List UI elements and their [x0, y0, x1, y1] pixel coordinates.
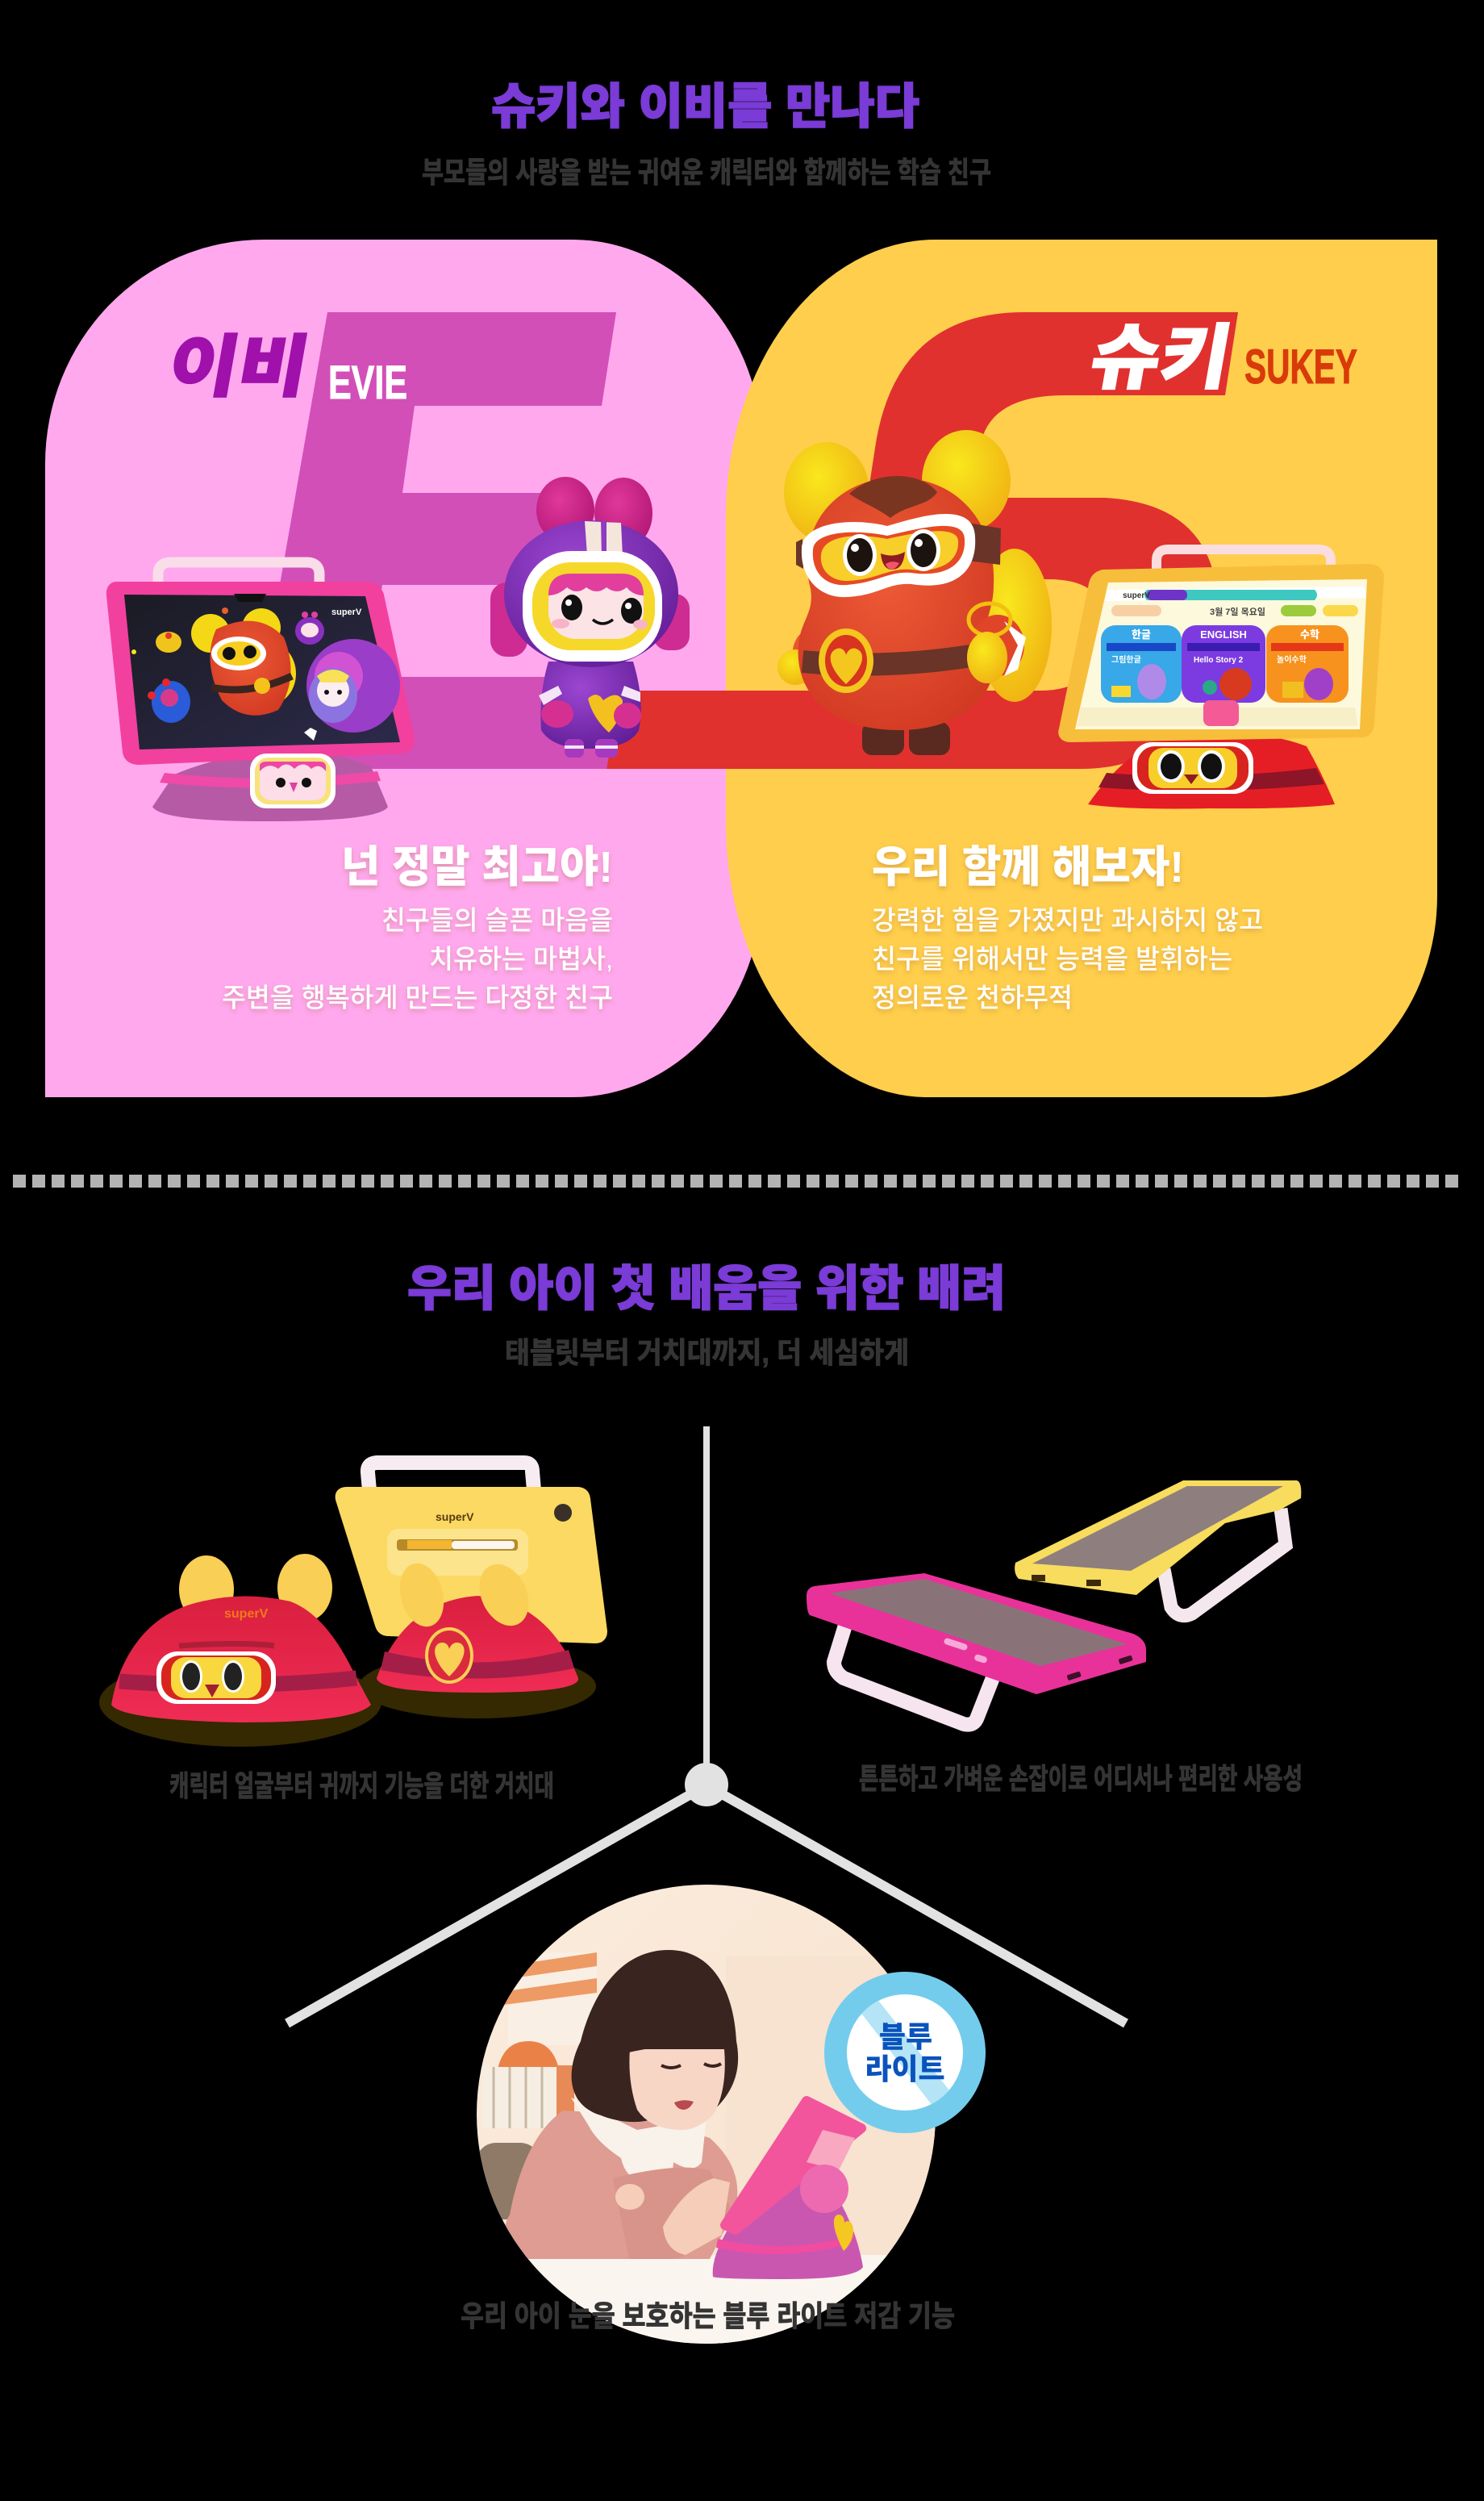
- yellow tablet handle: [1164, 1509, 1286, 1616]
- Evie badge on stand: [250, 754, 336, 808]
- badge: no blue light: [824, 1972, 986, 2133]
- buns: [536, 477, 652, 549]
- tablet screen UI: Hello Story 2: [1194, 656, 1244, 665]
- tablet handle: [158, 562, 319, 601]
- text block: Evie description: 치유하는 마법사,: [429, 944, 613, 974]
- text block: Evie description: 넌 정말 최고야!: [341, 843, 613, 891]
- front dome with Sukey face: superV: [224, 1607, 269, 1621]
- badge: no blue light: 블루: [879, 2020, 932, 2053]
- badge: no blue light: 라이트: [865, 2052, 945, 2086]
- big letter S: [607, 312, 1238, 769]
- tablet screen UI: superV: [1123, 591, 1150, 600]
- panel: Evie pink background: [45, 240, 762, 1097]
- stand base: [152, 749, 388, 821]
- text block: Evie description: [222, 843, 613, 1013]
- room background: [476, 1884, 937, 2345]
- heading: Evie name: 이비: [163, 329, 315, 405]
- text block: Sukey description: [872, 843, 1263, 1013]
- Sukey badge on stand: [1132, 742, 1253, 794]
- yellow tablet: [1015, 1480, 1301, 1595]
- text block: Evie description: 주변을 행복하게 만드는 다정한 친구: [222, 983, 613, 1013]
- body: [798, 478, 994, 730]
- title: care for first learning: 우리 아이 첫 배움을 위한 배려: [407, 1262, 1006, 1316]
- pink tablet: [807, 1573, 1146, 1694]
- connector lines with central node: [287, 1426, 1126, 2023]
- text block: Sukey description: 정의로운 천하무적: [872, 983, 1073, 1013]
- tablet screen UI: 3월 7일 목요일: [1210, 606, 1265, 617]
- goggles and face: [796, 514, 1001, 597]
- text block: Sukey description: 우리 함께 해보자!: [872, 843, 1184, 891]
- character: Sukey: [777, 430, 1052, 755]
- character: Evie: [490, 477, 690, 758]
- big letter E: [248, 312, 623, 769]
- subtitle: intro: 부모들의 사랑을 받는 귀여운 캐릭터와 함께하는 학습 친구: [422, 156, 991, 189]
- heading: Evie name: EVIE: [328, 357, 407, 409]
- tablet frame and screen: [113, 588, 408, 758]
- collar: [571, 2098, 707, 2175]
- illustration: yellow and pink tablets with handles: [807, 1480, 1301, 1725]
- ears: [784, 430, 1011, 542]
- mini Sukey on screen: [191, 608, 296, 716]
- table: [524, 2255, 887, 2344]
- feet: [862, 722, 950, 755]
- yellow tablet back: superV: [436, 1510, 474, 1523]
- text block: Sukey description: 강력한 힘을 가졌지만 과시하지 않고: [872, 905, 1263, 935]
- panel: Sukey yellow background: [726, 240, 1437, 1097]
- tablet screen UI: 한글: [1132, 628, 1151, 641]
- yellow tablet back: [341, 1493, 602, 1638]
- tablet frame: [1065, 570, 1378, 736]
- illustration: pink tablet on Evie stand: [113, 562, 408, 821]
- heading: Sukey name: 슈키: [1085, 319, 1237, 398]
- heading: Evie name: [163, 329, 407, 409]
- illustration: red stands with yellow tablet back: [99, 1463, 602, 1747]
- heart badge: [819, 628, 873, 693]
- mini characters on screen: [131, 608, 362, 741]
- tablet screen UI: [1075, 579, 1367, 729]
- caption: stands: 캐릭터 얼굴부터 귀까지 기능을 더한 거치대: [169, 1769, 554, 1802]
- strike stripe: [861, 2001, 948, 2104]
- tablet on purple stand: [713, 2101, 863, 2279]
- illustration: yellow tablet on Sukey stand: [1065, 549, 1378, 808]
- tablet handle: [1157, 549, 1331, 577]
- pink tablet handle: [834, 1620, 994, 1725]
- text block: Sukey description: 친구를 위해서만 능력을 발휘하는: [872, 944, 1232, 974]
- title: meet Sukey and Evie: 슈키와 이비를 만나다: [491, 80, 919, 134]
- rear dome with heart: [377, 1556, 578, 1693]
- right arm and ring: [967, 603, 1026, 683]
- left hand: [777, 632, 821, 685]
- body: [539, 662, 641, 758]
- tablet screen UI: 그림한글: [1111, 654, 1141, 665]
- tablet screen UI: ENGLISH: [1200, 628, 1247, 641]
- mini characters on screen: superV: [331, 608, 362, 617]
- tablet handle: [368, 1463, 536, 1509]
- shadows: [99, 1654, 596, 1747]
- hood: [849, 476, 937, 518]
- tablet screen UI: 수학: [1300, 628, 1319, 641]
- front dome with Sukey face: [111, 1554, 371, 1722]
- subtitle: care: 태블릿부터 거치대까지, 더 세심하게: [505, 1336, 909, 1369]
- photo: child using tablet: [476, 1884, 937, 2348]
- sweater: [506, 2111, 737, 2259]
- tail: [978, 549, 1052, 702]
- pillow and rug: [476, 1952, 597, 2219]
- text block: Evie description: 친구들의 슬픈 마음을: [381, 905, 613, 935]
- arm and hand: [613, 2168, 730, 2259]
- tablet screen UI: 놀이수학: [1277, 654, 1307, 665]
- belt: [802, 655, 976, 665]
- stand: [1088, 733, 1335, 808]
- head and visor: [490, 520, 690, 667]
- heading: Sukey name: [1085, 319, 1357, 398]
- caption: blue light reduction: 우리 아이 눈을 보호하는 블루 라이트 저감 기능: [461, 2299, 955, 2332]
- heading: Sukey name: SUKEY: [1244, 340, 1357, 394]
- hair and face: [572, 1950, 738, 2130]
- caption: tablets: 튼튼하고 가벼운 손잡이로 어디서나 편리한 사용성: [859, 1762, 1303, 1795]
